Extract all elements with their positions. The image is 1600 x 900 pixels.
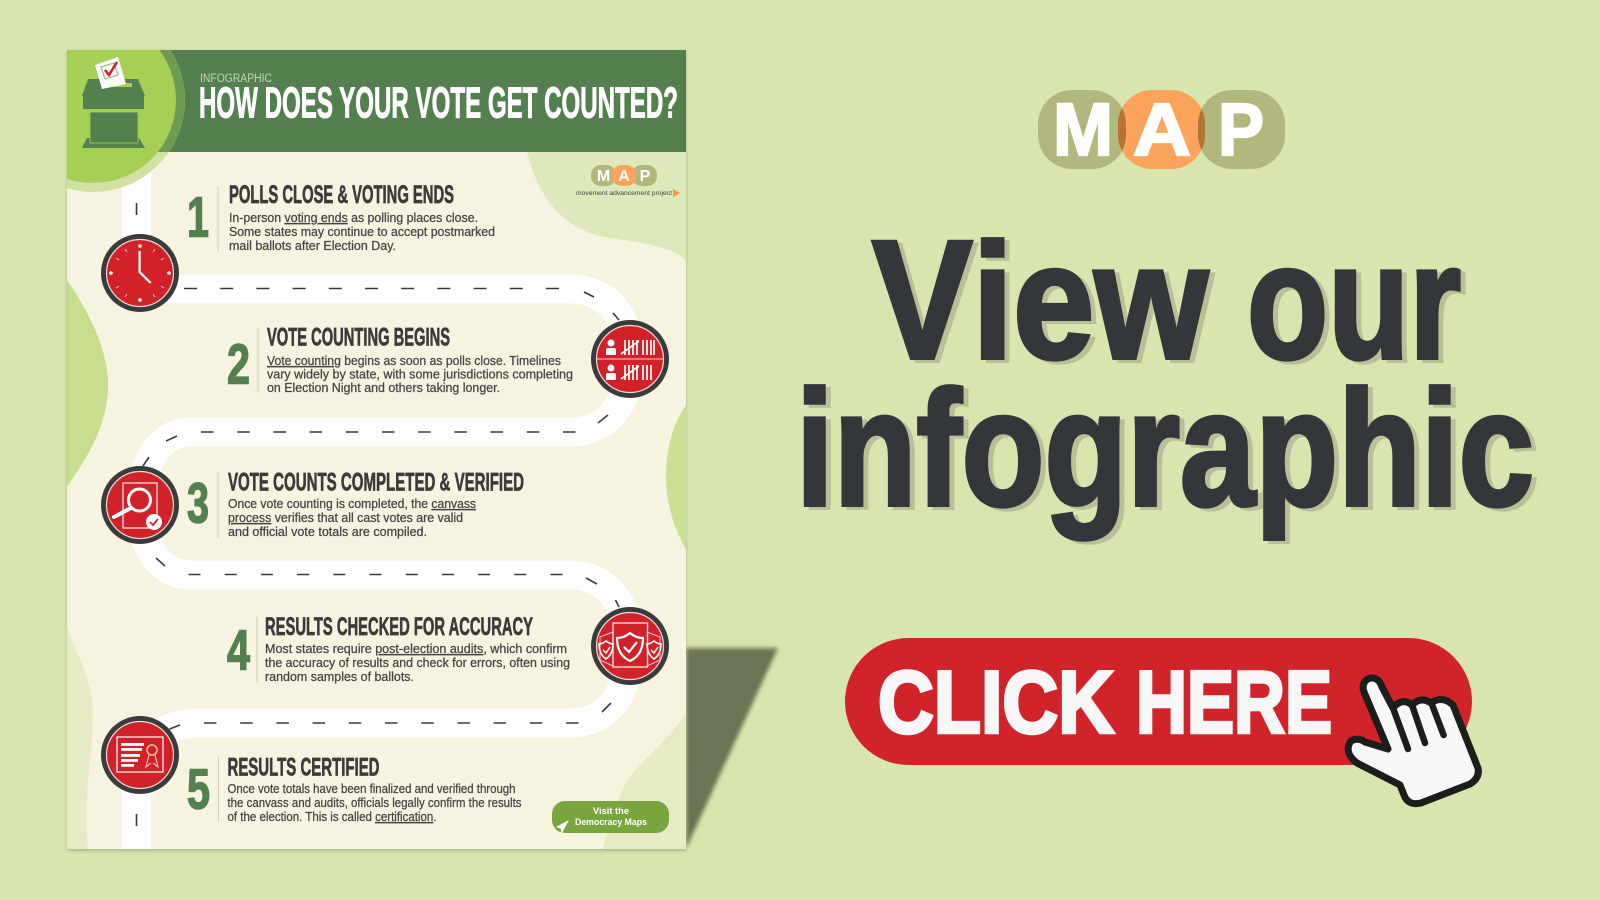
icon: pointing hand <box>1348 678 1478 804</box>
icon: clock <box>101 234 179 312</box>
headline <box>796 205 1534 540</box>
small MAP logo: movement advancement project <box>576 190 672 197</box>
winding road <box>136 150 630 849</box>
step 2: Vote counting begins as soon as polls close. Timelines <box>267 354 561 368</box>
small MAP logo: P <box>640 168 651 185</box>
small MAP logo <box>576 165 680 197</box>
step 1: POLLS CLOSE & VOTING ENDS <box>229 181 454 209</box>
step 1: mail ballots after Election Day. <box>229 239 396 253</box>
step 4: random samples of ballots. <box>265 670 414 684</box>
card slanted shadow <box>686 648 778 849</box>
small MAP logo: A <box>618 168 630 185</box>
button: click here: HERE <box>1136 652 1332 752</box>
icon: shields <box>591 607 669 685</box>
step 4: 4 <box>227 618 250 682</box>
step 5: RESULTS CERTIFIED <box>228 754 380 782</box>
step 3 <box>187 469 524 539</box>
step 3: VOTE COUNTS COMPLETED & VERIFIED <box>228 469 524 497</box>
button: visit the democracy maps <box>552 801 669 835</box>
MAP logo: M <box>1053 88 1113 171</box>
step 4: Most states require post-election audits, which confirm <box>265 642 567 656</box>
step 1: 1 <box>187 186 209 250</box>
icon: magnifier on document <box>101 466 179 544</box>
step 2: vary widely by state, with some jurisdictions completing <box>267 368 573 382</box>
step 3: process verifies that all cast votes are valid <box>228 511 463 525</box>
step 1: Some states may continue to accept postmarked <box>229 225 495 239</box>
title block: INFOGRAPHIC <box>200 73 272 85</box>
button: click here: CLICK <box>878 652 1114 752</box>
step 5: of the election. This is called certification. <box>228 810 437 824</box>
step 4: the accuracy of results and check for errors, often using <box>265 656 570 670</box>
title block <box>199 73 678 128</box>
step 5: the canvass and audits, officials legally confirm the results <box>228 796 522 810</box>
title block: HOW DOES YOUR VOTE GET COUNTED? <box>199 78 678 128</box>
icon: certificate <box>101 716 179 794</box>
button: visit the democracy maps: Democracy Maps <box>575 817 647 828</box>
icon: ballot box <box>82 57 145 148</box>
panel: infographic poster <box>66 50 688 852</box>
step 1: In-person voting ends as polling places close. <box>229 211 478 225</box>
step 3: 3 <box>187 472 209 536</box>
step 2 <box>227 324 573 396</box>
step 4 <box>227 613 570 684</box>
step 1 <box>187 181 495 253</box>
button: visit the democracy maps: Visit the <box>593 806 629 817</box>
MAP logo: A <box>1133 88 1191 171</box>
step 3: and official vote totals are compiled. <box>228 525 427 539</box>
headline: View <box>872 205 1208 394</box>
MAP logo: P <box>1218 88 1264 171</box>
step 5: Once vote totals have been finalized and verified through <box>228 782 516 796</box>
step 5 <box>187 754 522 824</box>
step 5: 5 <box>187 758 210 822</box>
step 4: RESULTS CHECKED FOR ACCURACY <box>265 613 533 641</box>
small MAP logo: M <box>597 168 610 185</box>
headline: our <box>1247 210 1461 393</box>
button: click here <box>845 638 1472 765</box>
step 2: VOTE COUNTING BEGINS <box>267 324 450 352</box>
step 3: Once vote counting is completed, the canvass <box>228 497 476 511</box>
header band <box>67 50 686 192</box>
step 2: 2 <box>227 332 250 396</box>
MAP logo <box>1038 88 1285 171</box>
icon: tally count <box>591 320 669 398</box>
step 2: on Election Night and others taking longer. <box>267 381 500 395</box>
